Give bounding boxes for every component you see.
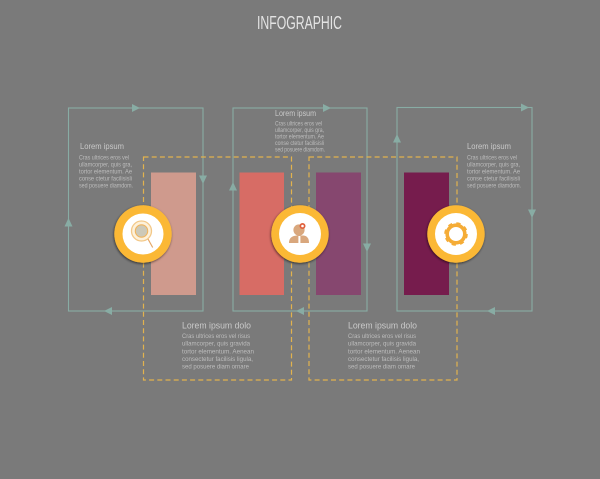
text block: right: tortor elementum. Ae	[467, 169, 520, 176]
text block: top middle	[275, 108, 325, 154]
text block: right: ullamcorper, quis gra,	[467, 162, 520, 168]
bar 4	[404, 172, 449, 295]
text block: bottom left: consectetur facilisis ligula,	[182, 356, 253, 363]
text block: left: sed posuere diamdom.	[79, 183, 133, 190]
text block: left: ullamcorper, quis gra,	[79, 162, 132, 168]
text block: left	[79, 141, 133, 190]
text block: right: sed posuere diamdom.	[467, 183, 521, 190]
text block: top middle: ullamcorper, quis gra,	[275, 127, 324, 134]
text block: bottom right: sed posuere diam ornare	[348, 364, 415, 371]
text block: top middle: Lorem ipsum	[275, 108, 316, 118]
text block: bottom left: tortor elementum. Aenean	[182, 348, 254, 355]
bar 2	[240, 172, 284, 295]
text block: right	[467, 141, 521, 190]
text block: bottom right: Lorem ipsum dolo	[348, 320, 417, 332]
teal arrow frame 2	[229, 104, 371, 315]
text block: left: Cras ultrices eros vel	[79, 154, 129, 162]
text block: bottom left: ullamcorper, quis gravida	[182, 341, 250, 348]
text block: bottom right: Cras ultrices eros vel risus	[348, 333, 417, 340]
text block: top middle: tortor elementum. Ae	[275, 134, 324, 140]
icon: businessman badge	[271, 205, 329, 263]
title: INFOGRAPHIC	[257, 13, 342, 33]
bar 3	[316, 172, 361, 295]
dashed frame 1	[144, 157, 292, 380]
dashed frame 2	[309, 157, 457, 380]
text block: left: Lorem ipsum	[80, 141, 124, 151]
text block: bottom left	[182, 320, 254, 371]
text block: top middle: Cras ultrices eros vel	[275, 120, 322, 128]
icon: gear badge	[427, 205, 485, 263]
text block: right: Lorem ipsum	[467, 141, 511, 151]
text block: top middle: conse ctetur facilisisli	[275, 140, 324, 147]
text block: bottom left: Lorem ipsum dolo	[182, 320, 251, 332]
text block: bottom right	[348, 320, 420, 371]
text block: bottom left: Cras ultrices eros vel risus	[182, 333, 251, 340]
bar 1	[151, 172, 196, 295]
text block: top middle: sed posuere diamdom.	[275, 146, 325, 154]
icon: magnifier badge	[114, 205, 172, 263]
text block: bottom right: ullamcorper, quis gravida	[348, 341, 416, 348]
text block: bottom left: sed posuere diam ornare	[182, 364, 249, 371]
text block: right: conse ctetur facilisisli	[467, 176, 520, 183]
text block: bottom right: consectetur facilisis ligula,	[348, 356, 419, 363]
text block: left: tortor elementum. Ae	[79, 169, 132, 176]
text block: left: conse ctetur facilisisli	[79, 176, 132, 183]
text block: bottom right: tortor elementum. Aenean	[348, 348, 420, 355]
teal arrow frame 3	[393, 104, 536, 315]
teal arrow frame 1	[64, 104, 207, 315]
text block: right: Cras ultrices eros vel	[467, 154, 517, 162]
